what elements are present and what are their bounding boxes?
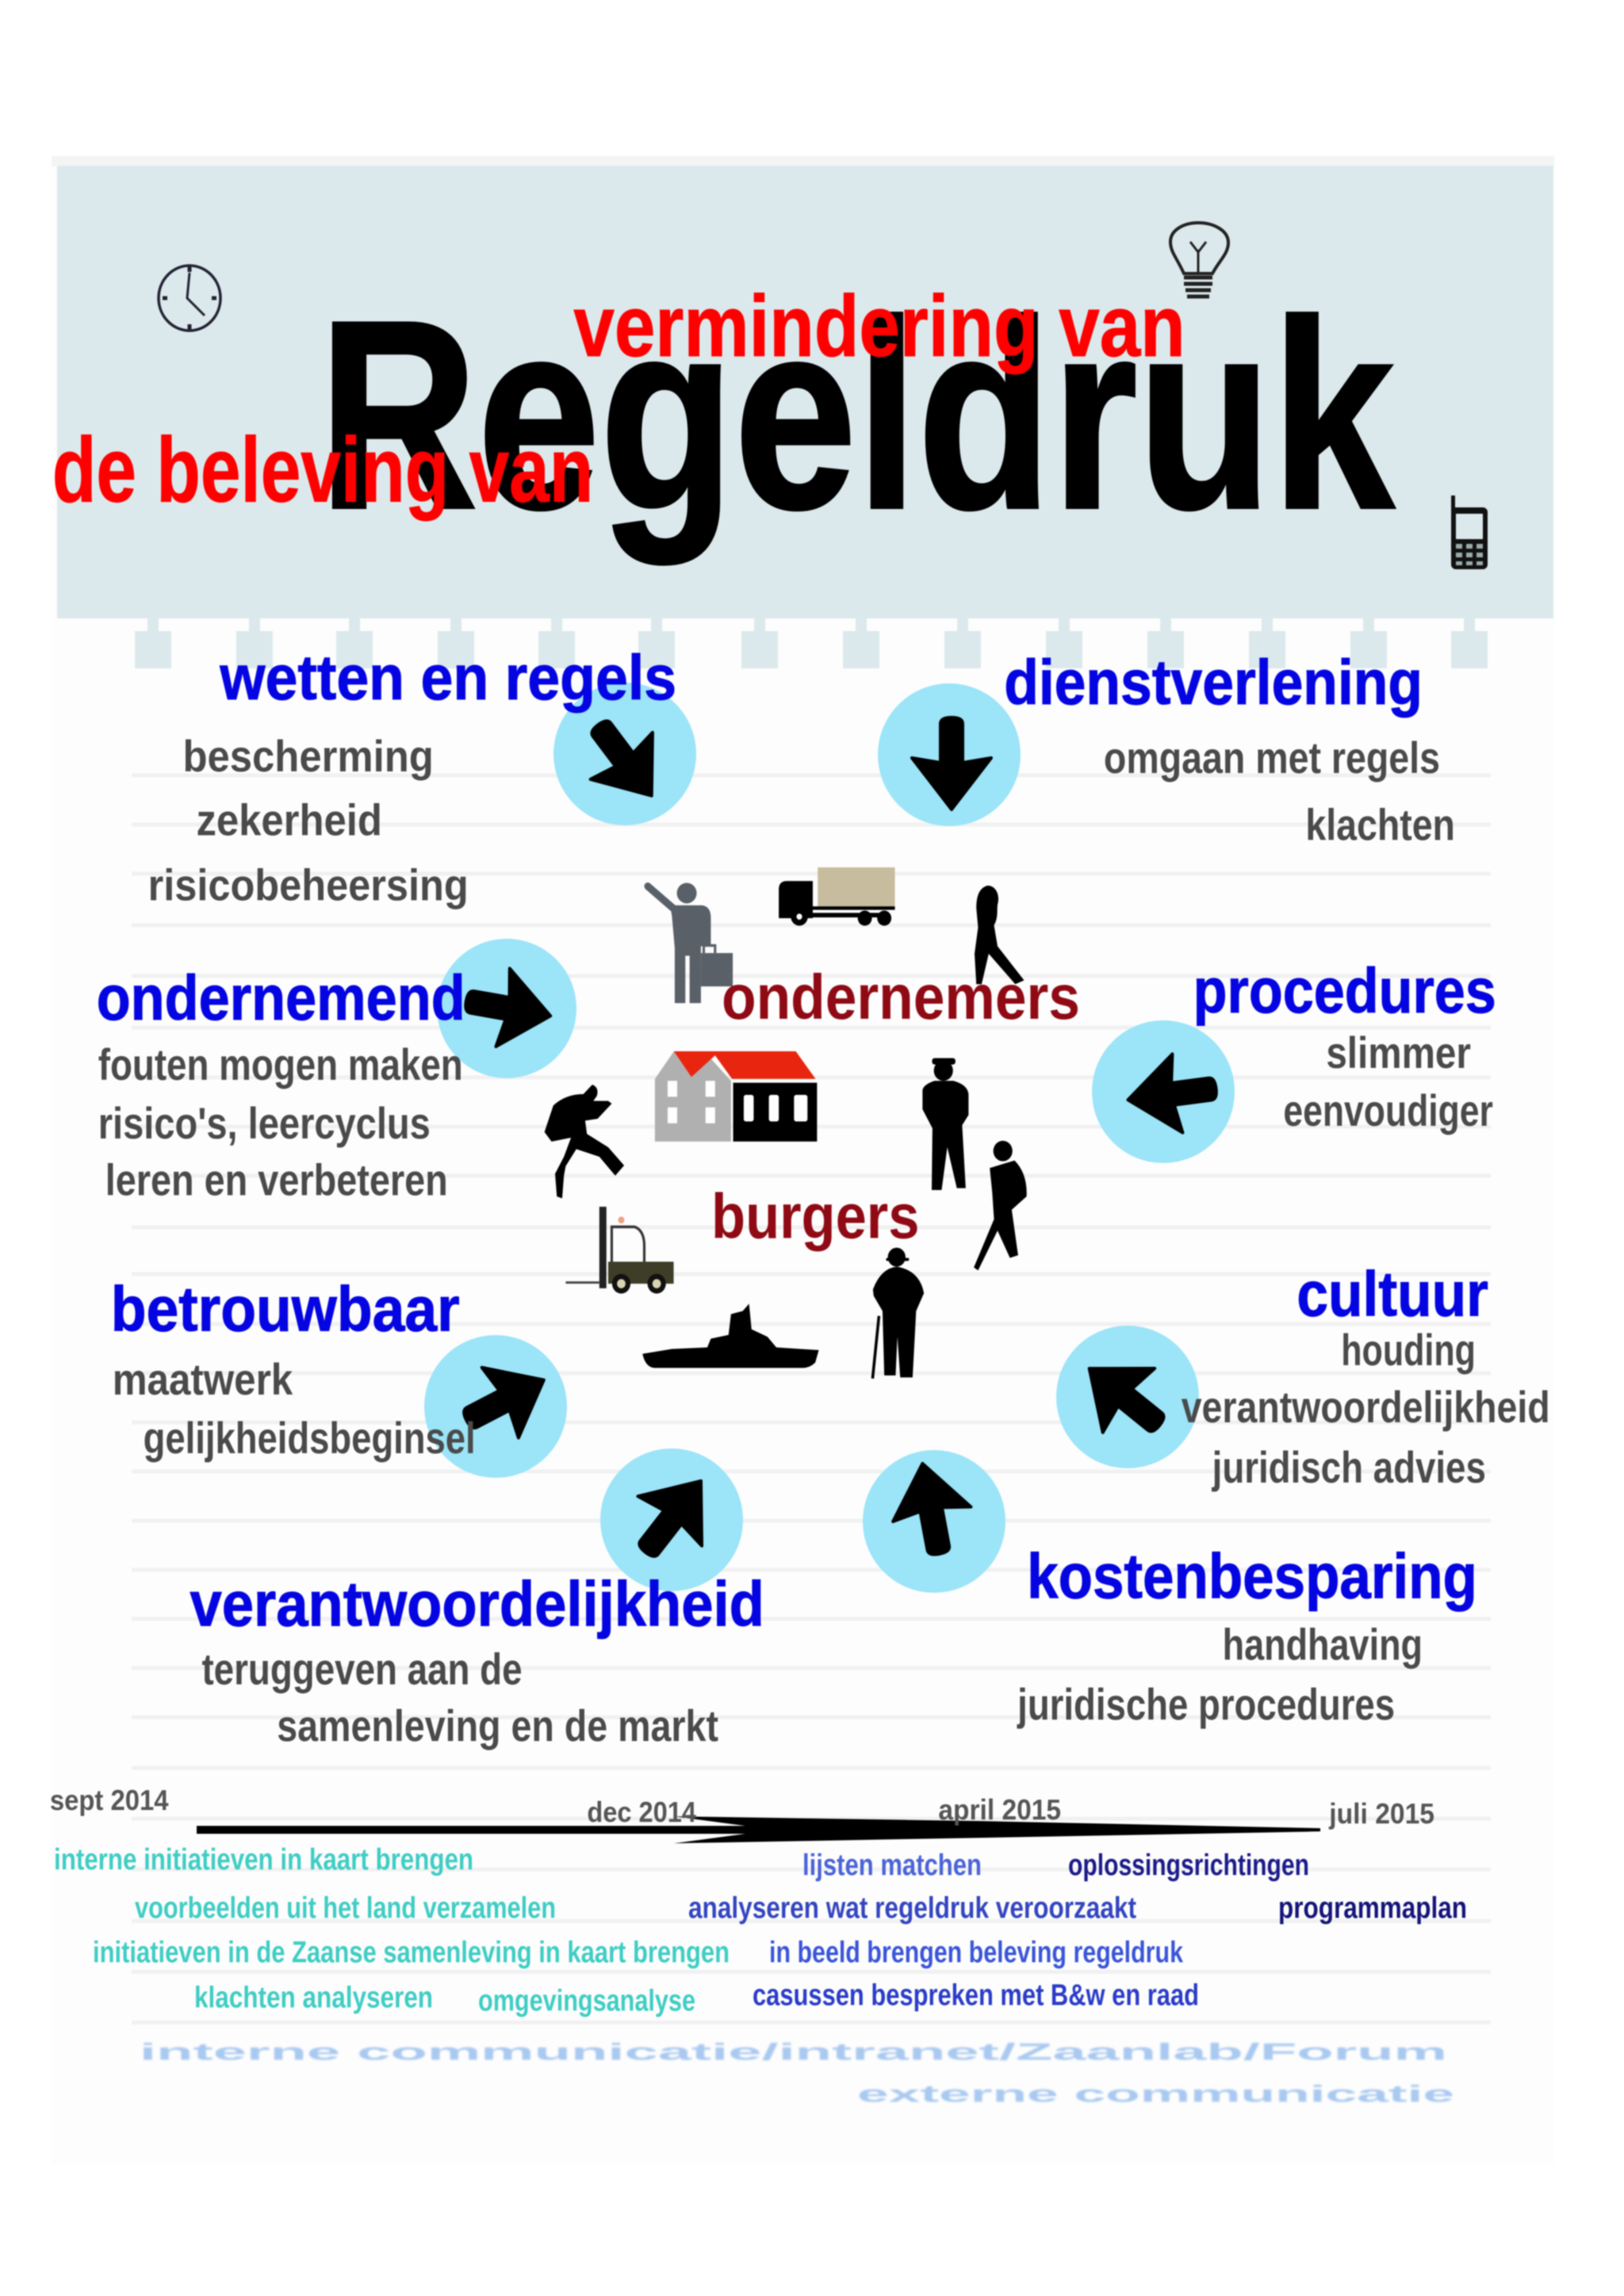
timeline tasks: omgevingsanalyse: [478, 1984, 695, 2018]
icon: officer: [922, 1058, 968, 1190]
label: ondernemers: ondernemers: [722, 962, 1080, 1032]
arrow circle: wetten en regels: [553, 683, 696, 825]
timeline tasks: initiatieven in de Zaanse samenleving in kaart brengen: [93, 1936, 730, 1969]
subtitle: vermindering van: vermindering van: [573, 278, 1185, 375]
block: kostenbesparing: kostenbesparing: [1027, 1541, 1477, 1612]
timeline dates: dec 2014: [587, 1796, 696, 1828]
timeline tasks: interne initiatieven in kaart brengen: [54, 1843, 473, 1877]
timeline tasks: lijsten matchen: [802, 1849, 982, 1882]
communication lines: interne communicatie/intranet/Zaanlab/Forum: [140, 2039, 1447, 2065]
block: dienstverlening: [1004, 647, 1455, 850]
arrow circle: cultuur: [1056, 1326, 1199, 1468]
block: betrouwbaar: [111, 1273, 476, 1463]
timeline tasks: oplossingsrichtingen: [1068, 1849, 1309, 1882]
block: ondernemend: risico's, leercyclus: [98, 1098, 431, 1148]
icon: walking woman: [975, 886, 1024, 984]
icon: clock: [159, 266, 220, 331]
block: verantwoordelijkheid: teruggeven aan de: [201, 1644, 523, 1693]
block: procedures: [1193, 955, 1496, 1135]
block: wetten en regels: [148, 642, 676, 909]
icon: house and barn: [655, 1051, 817, 1142]
label: burgers: burgers: [711, 1181, 919, 1252]
block: kostenbesparing: juridische procedures: [1017, 1679, 1395, 1729]
arrow circle: ondernemend: [437, 939, 576, 1078]
block: betrouwbaar: maatwerk: [113, 1354, 293, 1404]
icon: ship: [642, 1304, 819, 1368]
timeline tasks: voorbeelden uit het land verzamelen: [135, 1892, 556, 1925]
block: verantwoordelijkheid: [190, 1568, 764, 1751]
icon: hitchhiker with suitcase: [648, 883, 733, 1003]
block: ondernemend: leren en verbeteren: [105, 1155, 448, 1205]
block: dienstverlening: klachten: [1305, 800, 1455, 850]
block: cultuur: [1182, 1258, 1550, 1492]
timeline tasks: in beeld brengen beleving regeldruk: [769, 1936, 1184, 1969]
timeline dates: sept 2014: [50, 1784, 169, 1816]
timeline tasks: analyseren wat regeldruk veroorzaakt: [688, 1892, 1136, 1925]
block: kostenbesparing: handhaving: [1223, 1619, 1423, 1669]
block: betrouwbaar: gelijkheidsbeginsel: [144, 1413, 476, 1463]
block: wetten en regels: zekerheid: [196, 795, 382, 845]
arrow circle: betrouwbaar: [424, 1335, 567, 1478]
communication lines: externe communicatie: [857, 2081, 1454, 2107]
block: cultuur: cultuur: [1297, 1258, 1488, 1329]
block: wetten en regels: risicobeheersing: [148, 859, 469, 909]
icon: truck: [779, 867, 895, 926]
block: cultuur: houding: [1341, 1325, 1476, 1375]
timeline tasks: programmaplan: [1278, 1892, 1467, 1925]
timeline dates: april 2015: [938, 1793, 1061, 1826]
arrow circle: procedures: [1092, 1020, 1235, 1163]
block: kostenbesparing: [1017, 1541, 1477, 1729]
block: procedures: eenvoudiger: [1283, 1085, 1493, 1135]
block: ondernemend: [97, 962, 465, 1205]
block: dienstverlening: omgaan met regels: [1104, 733, 1440, 783]
arrow circle: verantwoordelijkheid: [600, 1448, 743, 1591]
block: ondernemend: ondernemend: [97, 962, 465, 1033]
arrow circle: dienstverlening: [878, 683, 1021, 826]
timeline tasks: [54, 1843, 1467, 2018]
icon: light bulb: [1170, 223, 1228, 297]
timeline dates: juli 2015: [1328, 1797, 1434, 1830]
icon: mobile phone: [1451, 496, 1488, 569]
block: procedures: slimmer: [1326, 1027, 1471, 1077]
title: Regeldruk: [319, 265, 1396, 566]
block: wetten en regels: bescherming: [182, 731, 434, 781]
block: procedures: procedures: [1193, 955, 1496, 1026]
block: dienstverlening: dienstverlening: [1004, 647, 1423, 718]
block: verantwoordelijkheid: samenleving en de markt: [277, 1701, 718, 1751]
icon: forklift: [565, 1207, 674, 1294]
timeline arrow: [197, 1816, 1320, 1843]
central icons group: [545, 867, 1027, 1379]
icon: running man: [545, 1085, 624, 1199]
icon: old man with cane: [872, 1248, 924, 1379]
block: verantwoordelijkheid: verantwoordelijkheid: [190, 1568, 764, 1639]
icon: person with backpack: [974, 1141, 1027, 1270]
block: ondernemend: fouten mogen maken: [98, 1039, 463, 1089]
subtitle: de beleving van: de beleving van: [52, 419, 593, 522]
timeline dates: [50, 1784, 1434, 1830]
panel: header banner: [57, 166, 1553, 668]
block: wetten en regels: wetten en regels: [219, 642, 676, 713]
timeline tasks: casussen bespreken met B&w en raad: [753, 1979, 1199, 2012]
block: cultuur: juridisch advies: [1212, 1442, 1486, 1492]
block: betrouwbaar: betrouwbaar: [111, 1273, 460, 1344]
communication lines: [140, 2039, 1454, 2107]
arrow circle: kostenbesparing: [863, 1450, 1005, 1593]
timeline tasks: klachten analyseren: [194, 1981, 433, 2015]
block: cultuur: verantwoordelijkheid: [1182, 1382, 1550, 1432]
